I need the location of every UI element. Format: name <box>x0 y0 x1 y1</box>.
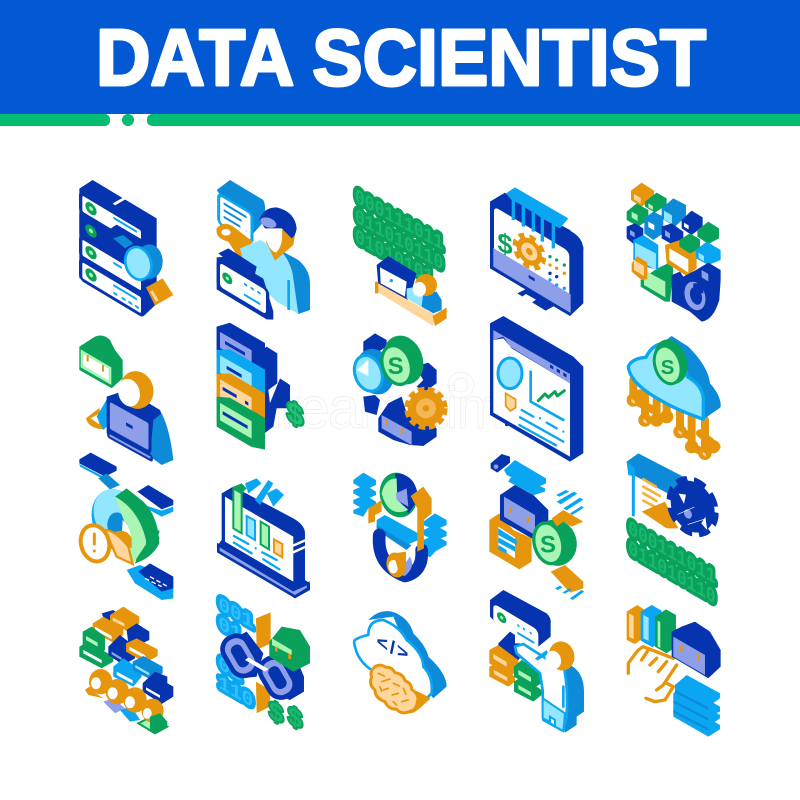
icon: chain link with binary: $ <box>288 702 303 735</box>
icon: stacked databases with dollar <box>217 315 303 455</box>
gear <box>407 389 445 428</box>
orange arrows <box>368 500 382 523</box>
network <box>633 380 717 453</box>
headset <box>379 535 422 576</box>
donut <box>83 482 150 558</box>
hand <box>86 408 103 429</box>
title: DATA SCIENTIST <box>96 13 706 102</box>
text lines <box>234 536 279 569</box>
coin <box>530 515 582 571</box>
icon: binary cloud with laptop user: 011010110 <box>355 205 443 277</box>
person body <box>97 397 123 430</box>
orange cards <box>489 645 518 687</box>
person <box>560 663 584 733</box>
icon: chain link with binary <box>218 594 310 735</box>
icon: data blocks with power button <box>627 183 721 322</box>
team heads <box>103 698 125 713</box>
coin <box>648 335 693 388</box>
green divider bar <box>0 114 800 126</box>
green card <box>641 262 673 302</box>
head <box>116 367 158 413</box>
middle band <box>377 515 418 545</box>
icon: presenter with server and cards <box>489 590 584 733</box>
bars <box>233 488 282 557</box>
person body <box>280 250 310 314</box>
text lines <box>519 410 563 445</box>
code symbol: </> <box>377 631 408 666</box>
top binary digits: 001 <box>218 594 253 635</box>
icon: scroll, gear and binary <box>627 453 716 610</box>
briefcase <box>79 336 123 388</box>
icon: laptop with bar chart <box>217 478 310 598</box>
briefcase <box>500 485 548 538</box>
green cards <box>514 660 542 702</box>
icon: server rack with magnifier <box>79 172 173 324</box>
dollar sign: $ <box>497 226 513 261</box>
power button <box>672 263 721 322</box>
icon: binary cloud with laptop user <box>355 185 447 326</box>
icon: cloud with coin and network <box>627 335 721 460</box>
desk and user <box>375 282 435 326</box>
icon: cloud with code and brain <box>354 611 447 714</box>
server panel <box>490 590 551 647</box>
comb binding <box>506 187 568 248</box>
icon: organization blocks and team <box>79 607 173 733</box>
header banner <box>0 0 800 114</box>
stand <box>517 288 559 311</box>
icon: cloud with coin and network: S <box>661 356 674 379</box>
icon: browser window with search and chart <box>490 316 583 462</box>
watermark: dreamstime <box>250 376 535 441</box>
icon: briefcase, coin magnifier and stats: S <box>540 532 556 559</box>
percent symbols <box>245 478 284 507</box>
cloud <box>657 336 721 421</box>
chain links <box>223 632 263 678</box>
laptop <box>108 400 152 461</box>
icon: pie clock, coin, gear and briefcase <box>350 330 445 446</box>
left stacked lines <box>353 473 376 517</box>
bottom binary digits <box>218 653 253 714</box>
gear <box>670 475 715 538</box>
icon: pie chart with headset and arrows <box>353 468 447 580</box>
binary digits: 000111011 <box>355 185 443 257</box>
top binary digits: 01 <box>218 613 242 648</box>
icon: hand, books, briefcase and stack <box>627 605 721 737</box>
magnifier <box>498 358 522 389</box>
coin <box>377 330 430 390</box>
tall cyan card <box>633 235 658 270</box>
icon: pie clock, coin, gear and briefcase: S <box>388 353 404 380</box>
icon: donut chart with alert <box>77 453 173 600</box>
binary digits: 011010110 <box>628 536 716 610</box>
laptop <box>377 256 417 301</box>
gear <box>515 231 543 272</box>
head <box>546 639 578 673</box>
handles and bars <box>552 510 583 527</box>
head <box>266 230 296 261</box>
bottom binary digits: 110 <box>218 673 253 714</box>
chat bubble <box>217 180 265 243</box>
hand <box>628 647 677 702</box>
briefcase <box>672 622 721 678</box>
brain <box>407 692 431 714</box>
data dots <box>550 257 564 265</box>
stack <box>673 675 720 737</box>
orange box <box>489 513 532 569</box>
orange dividers <box>256 612 271 713</box>
icon: briefcase, coin magnifier and stats <box>489 454 584 600</box>
orange card <box>665 240 697 276</box>
bottom binary digits: 01 <box>218 653 242 688</box>
icon: binary cloud with laptop user: 01010101 <box>355 225 433 291</box>
icon: monitor with gear and dollar <box>490 187 583 316</box>
icon: briefcase and person with laptop <box>79 336 173 465</box>
icon: person with chat bubble and server <box>216 180 310 323</box>
dollar signs: $ <box>269 697 284 730</box>
data bars <box>79 453 117 477</box>
books <box>627 605 645 644</box>
green briefcase <box>269 627 310 672</box>
line chart <box>531 372 563 420</box>
server box <box>217 251 273 323</box>
clock <box>350 343 400 400</box>
top binary digits <box>218 594 253 655</box>
right stacked lines <box>423 513 447 557</box>
dollar: $ <box>287 395 303 434</box>
briefcase <box>378 397 437 446</box>
binary digits: 000111011 <box>628 516 716 590</box>
pie <box>375 468 422 522</box>
scroll <box>633 470 690 537</box>
